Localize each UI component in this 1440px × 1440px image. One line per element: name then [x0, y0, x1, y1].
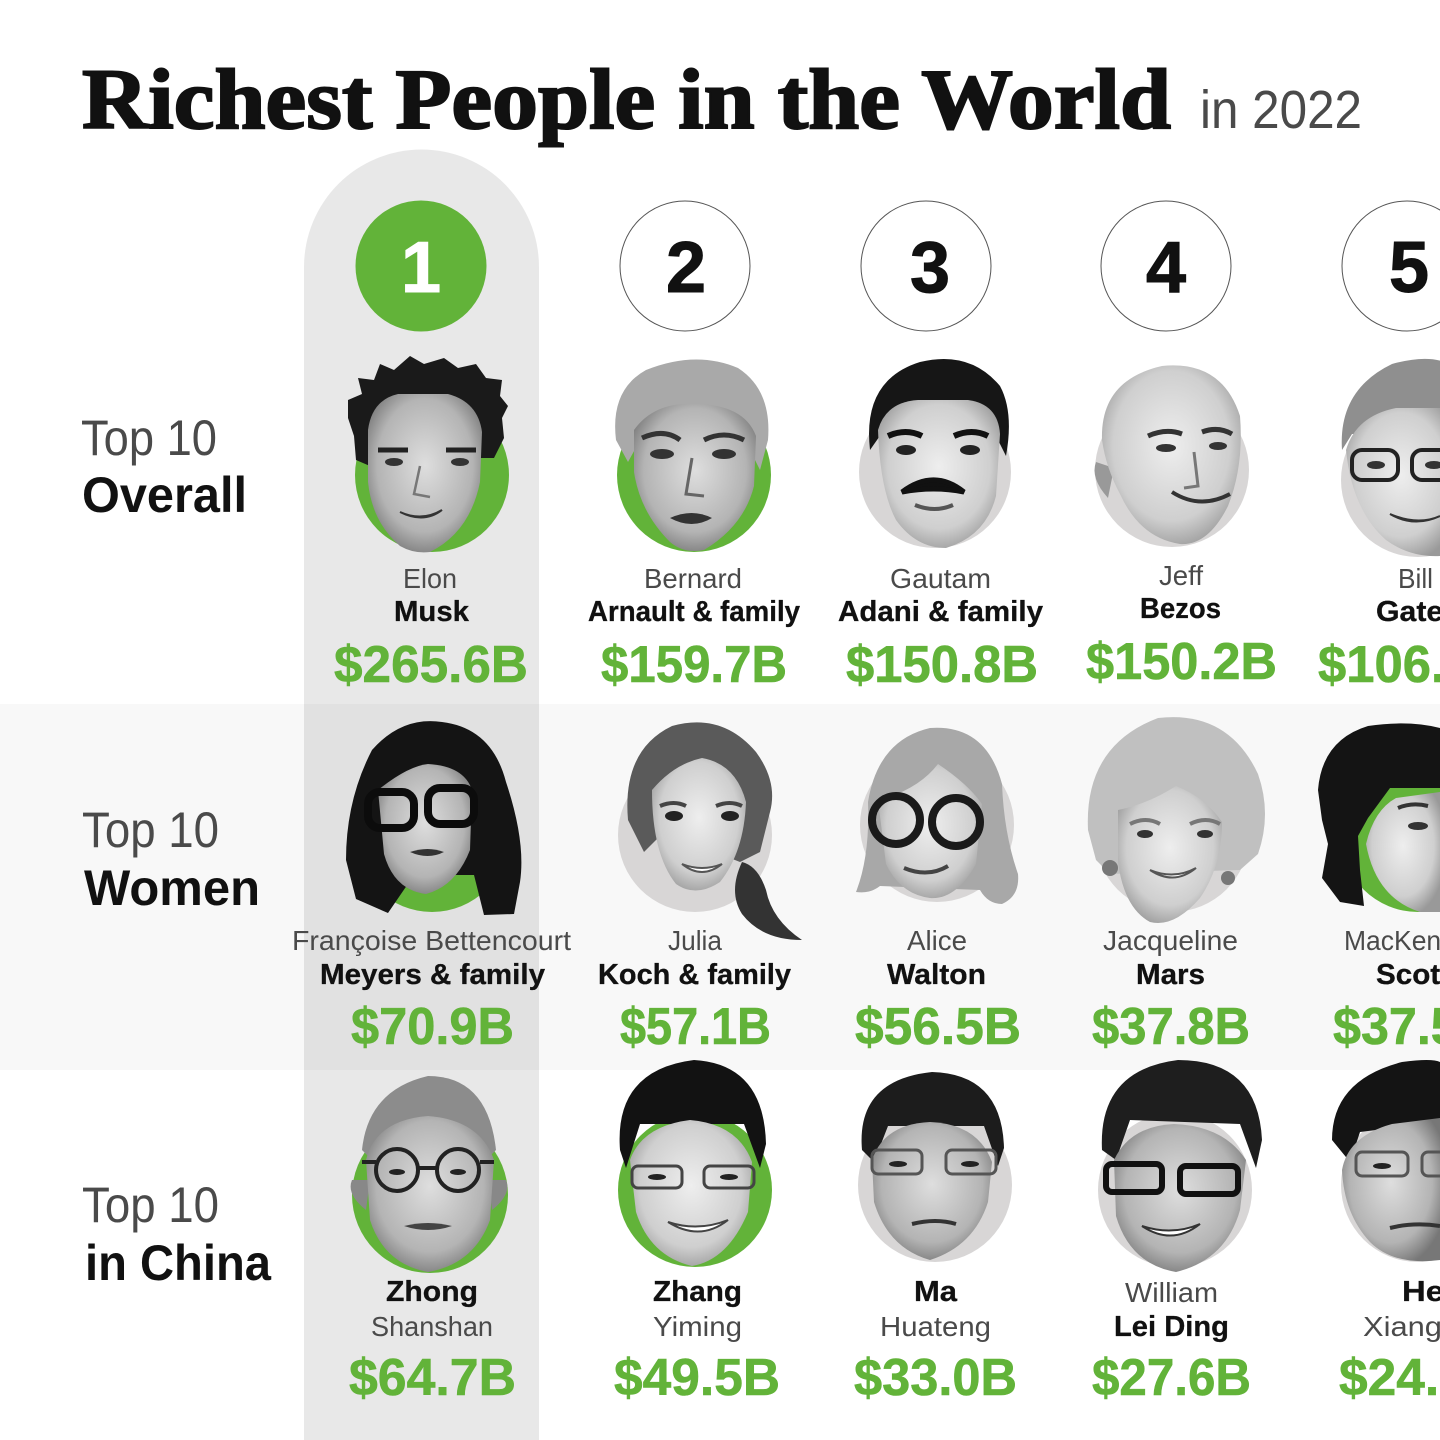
name: Zhang Yiming: Zhang — [653, 1276, 742, 1308]
row label: top 10 overall: Overall — [82, 467, 247, 523]
portrait: Jacqueline Mars — [1088, 717, 1265, 923]
highlighted column: rank 1 — [304, 149, 539, 1440]
rank 1 badge — [356, 200, 486, 332]
name: Bernard Arnault: Bernard — [644, 563, 742, 594]
name: Jeff Bezos: $150.2B — [1086, 633, 1277, 691]
portrait: Julia Koch — [618, 722, 802, 940]
name: Alice Walton: Alice — [907, 925, 967, 956]
band: top 10 women row — [0, 704, 1440, 1070]
name: Ma Huateng — [854, 1276, 1017, 1407]
name: Alice Walton: $56.5B — [855, 998, 1021, 1056]
name: He Xiangjian: He — [1402, 1276, 1440, 1308]
name: He Xiangjian — [1339, 1276, 1440, 1407]
portrait: Ma Huateng — [858, 1072, 1012, 1262]
rank 2 badge: 2 — [666, 228, 706, 308]
name: William Lei Ding — [1092, 1277, 1251, 1407]
portrait: Bernard Arnault — [615, 359, 771, 552]
name: Jacqueline Mars: Mars — [1136, 959, 1205, 991]
rank 5 badge: 5 — [1389, 228, 1429, 308]
portrait: Zhong Shanshan — [351, 1076, 508, 1273]
portrait: Gautam Adani — [859, 359, 1011, 548]
name: MacKenzie Scott — [1333, 925, 1440, 1056]
row label: top 10 overall: Top 10 — [81, 410, 217, 466]
name: Elon Musk: Musk — [394, 596, 470, 628]
name: Alice Walton — [855, 925, 1021, 1056]
row label: top 10 women: Women — [84, 860, 260, 916]
name: Alice Walton: Walton — [887, 959, 986, 991]
name: Bill Gates — [1318, 563, 1440, 694]
name: Julia Koch: Julia — [668, 925, 722, 956]
name: Julia Koch: $57.1B — [620, 998, 771, 1056]
name: Zhong Shanshan: Zhong — [386, 1276, 478, 1308]
name: William Lei Ding: William — [1125, 1277, 1218, 1308]
title: Richest People in the World — [82, 51, 1171, 147]
name: Jacqueline Mars — [1092, 925, 1250, 1056]
rank 2 badge — [620, 201, 750, 331]
name: Bernard Arnault — [588, 563, 800, 694]
name: Zhang Yiming: Yiming — [653, 1311, 742, 1342]
row label: top 10 in China: in China — [85, 1235, 272, 1291]
portrait: Jeff Bezos — [1094, 365, 1249, 547]
portrait: He Xiangjian — [1332, 1060, 1440, 1262]
name: Julia Koch — [598, 925, 791, 1056]
row label: top 10 overall — [81, 410, 247, 523]
portrait: William Lei Ding — [1098, 1060, 1262, 1272]
name: Elon Musk: $265.6B — [334, 636, 528, 694]
row label: top 10 women: Top 10 — [82, 802, 219, 858]
row label: top 10 in China: Top 10 — [82, 1177, 219, 1233]
rank 4 badge: 4 — [1146, 228, 1186, 308]
name: Françoise Bettencourt Meyers: Françoise Bettencourt — [292, 925, 571, 956]
name: William Lei Ding: Lei Ding — [1114, 1311, 1229, 1343]
rank 3 badge: 3 — [910, 228, 950, 308]
name: Gautam Adani: Gautam — [890, 563, 991, 594]
title: in 2022 — [1200, 80, 1362, 140]
name: Ma Huateng: $33.0B — [854, 1349, 1017, 1407]
name: Zhong Shanshan: $64.7B — [349, 1349, 516, 1407]
portrait: Françoise Bettencourt Meyers — [346, 721, 521, 915]
name: Jacqueline Mars: Jacqueline — [1103, 925, 1238, 956]
portrait: MacKenzie Scott — [1318, 723, 1440, 912]
rank 5 badge — [1342, 201, 1440, 331]
name: Françoise Bettencourt Meyers: Meyers & family — [320, 959, 545, 991]
name: Gautam Adani: Adani & family — [838, 596, 1043, 628]
name: Zhong Shanshan: Shanshan — [371, 1311, 493, 1342]
name: Jeff Bezos — [1086, 560, 1277, 691]
name: Zhang Yiming: $49.5B — [614, 1349, 780, 1407]
name: Jeff Bezos: Bezos — [1140, 593, 1221, 625]
portrait: Elon Musk — [348, 356, 509, 552]
name: Françoise Bettencourt Meyers: $70.9B — [351, 998, 514, 1056]
rank 3 badge — [861, 201, 991, 331]
name: Zhong Shanshan — [349, 1276, 516, 1407]
name: Bernard Arnault: Arnault & family — [588, 596, 800, 628]
row label: top 10 in China — [82, 1177, 272, 1291]
name: Françoise Bettencourt Meyers — [292, 925, 571, 1056]
name: Jeff Bezos: Jeff — [1159, 560, 1203, 591]
name: Jacqueline Mars: $37.8B — [1092, 998, 1250, 1056]
rank 1 badge: 1 — [401, 228, 441, 308]
name: Gautam Adani — [838, 563, 1043, 694]
portrait: Bill Gates — [1341, 359, 1440, 557]
name: Elon Musk — [334, 563, 528, 694]
rank 4 badge — [1101, 201, 1231, 331]
name: Zhang Yiming — [614, 1276, 780, 1407]
name: Elon Musk: Elon — [403, 563, 457, 594]
name: Ma Huateng: Huateng — [880, 1311, 991, 1342]
name: Ma Huateng: Ma — [914, 1276, 958, 1308]
row label: top 10 women — [82, 802, 260, 916]
name: Gautam Adani: $150.8B — [846, 636, 1038, 694]
portrait: Alice Walton — [856, 728, 1018, 904]
name: Bernard Arnault: $159.7B — [601, 636, 787, 694]
name: William Lei Ding: $27.6B — [1092, 1349, 1251, 1407]
portrait: Zhang Yiming — [618, 1060, 772, 1267]
name: Julia Koch: Koch & family — [598, 959, 791, 991]
name: Bill Gates: Bill — [1398, 563, 1433, 594]
